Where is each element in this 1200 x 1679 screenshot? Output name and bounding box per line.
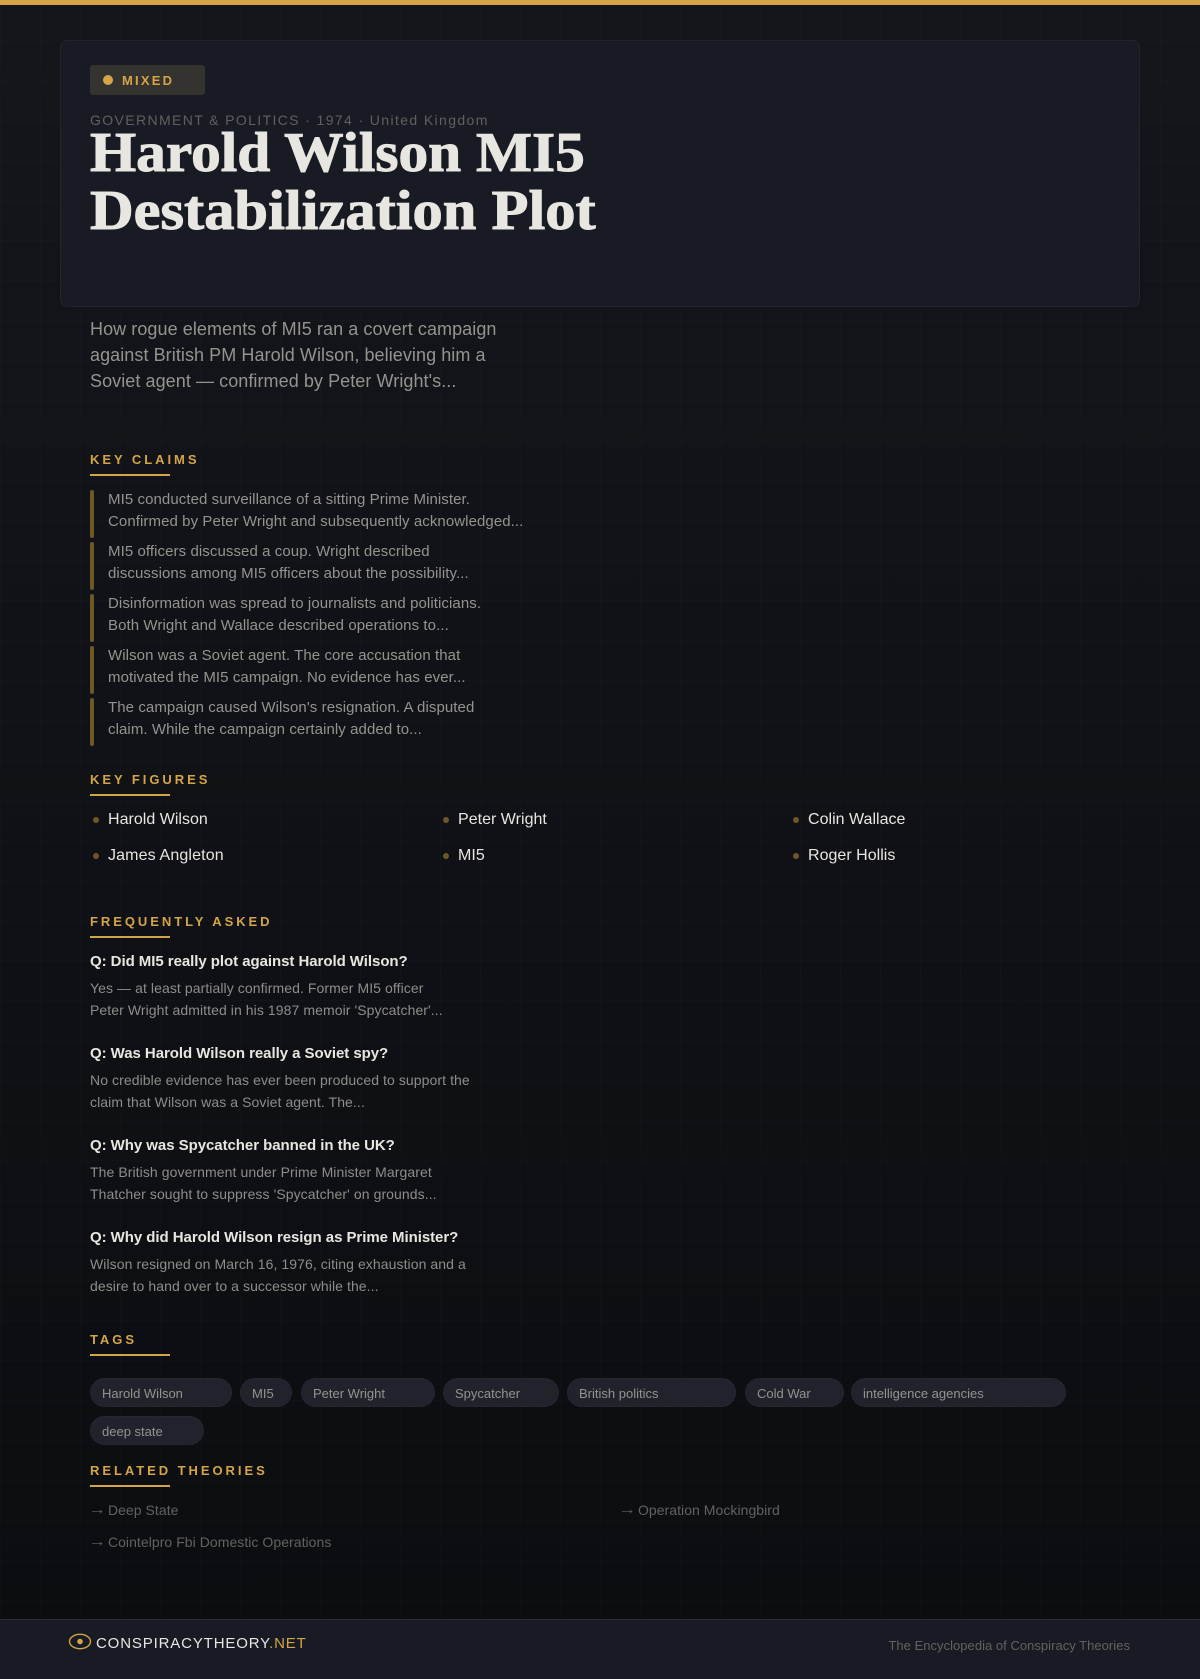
subtitle: How rogue elements of MI5 ran a covert campaign <box>90 319 496 339</box>
related link: → <box>88 1501 106 1517</box>
faq 2: Q: Was Harold Wilson really a Soviet spy? <box>90 1045 388 1062</box>
faq 4: Q: Why did Harold Wilson resign as Prime Minister? <box>90 1229 458 1246</box>
top accent bar <box>0 0 1200 5</box>
figure: Harold Wilson: Harold Wilson <box>108 811 208 828</box>
tag: Cold War <box>757 1386 811 1401</box>
title <box>90 122 596 242</box>
figure: Colin Wallace: Colin Wallace <box>808 811 905 828</box>
subtitle: Soviet agent — confirmed by Peter Wright's... <box>90 371 456 391</box>
footer tagline: The Encyclopedia of Conspiracy Theories <box>888 1638 1130 1653</box>
faq 4 <box>90 1229 466 1294</box>
heading: key figures: KEY FIGURES <box>90 772 210 787</box>
tag <box>301 1378 435 1407</box>
tag: Harold Wilson <box>102 1386 183 1401</box>
panel: header card <box>60 40 1140 307</box>
tag: Peter Wright <box>313 1386 385 1401</box>
tag <box>240 1378 292 1407</box>
figure: MI5: MI5 <box>458 847 485 864</box>
figure: Roger Hollis: Roger Hollis <box>808 847 895 864</box>
subtitle <box>90 319 496 391</box>
badge dot <box>103 75 113 85</box>
tag: British politics <box>579 1386 658 1401</box>
tag <box>443 1378 559 1407</box>
heading: related theories: RELATED THEORIES <box>90 1463 268 1478</box>
tag: MI5 <box>252 1386 274 1401</box>
faq 1: Yes — at least partially confirmed. Former MI5 officer <box>90 980 423 996</box>
footer logo text: CONSPIRACYTHEORY.NET <box>96 1635 307 1652</box>
figure: MI5 <box>443 847 485 864</box>
faq 2: No credible evidence has ever been produced to support the <box>90 1072 470 1088</box>
claim 3 <box>90 594 481 642</box>
tag: deep state <box>102 1424 163 1439</box>
tag: intelligence agencies <box>863 1386 984 1401</box>
claim 2 <box>90 542 469 590</box>
claim 2: discussions among MI5 officers about the possibility... <box>108 565 469 582</box>
claim 2: MI5 officers discussed a coup. Wright described <box>108 543 430 560</box>
claim 3: Disinformation was spread to journalists and politicians. <box>108 595 481 612</box>
claim 1: MI5 conducted surveillance of a sitting Prime Minister. <box>108 491 470 508</box>
title: Destabilization Plot <box>90 180 596 242</box>
claim 1: Confirmed by Peter Wright and subsequently acknowledged... <box>108 513 523 530</box>
related link: → <box>88 1533 106 1549</box>
badge label: MIXED <box>122 73 174 88</box>
faq 1: Q: Did MI5 really plot against Harold Wilson? <box>90 953 408 970</box>
tag <box>567 1378 736 1407</box>
tag <box>745 1378 844 1407</box>
faq 3: The British government under Prime Minister Margaret <box>90 1164 432 1180</box>
tag <box>90 1416 204 1445</box>
faq 4: Wilson resigned on March 16, 1976, citing exhaustion and a <box>90 1256 466 1272</box>
figure: Peter Wright: Peter Wright <box>458 811 547 828</box>
related link: → <box>618 1501 636 1517</box>
claim 4: motivated the MI5 campaign. No evidence has ever... <box>108 669 466 686</box>
claim 4 <box>90 646 466 694</box>
claim 5 <box>90 698 474 746</box>
figure: James Angleton: James Angleton <box>108 847 224 864</box>
tag: Spycatcher <box>455 1386 520 1401</box>
heading: tags: TAGS <box>90 1332 137 1347</box>
icon: eye <box>68 1634 92 1650</box>
claim 5: The campaign caused Wilson's resignation. A disputed <box>108 699 474 716</box>
claim 3: Both Wright and Wallace described operations to... <box>108 617 449 634</box>
faq 3: Q: Why was Spycatcher banned in the UK? <box>90 1137 395 1154</box>
badge: mixed verdict <box>90 65 205 95</box>
related link: Cointelpro Fbi Domestic Operations <box>108 1534 331 1550</box>
heading: key claims: KEY CLAIMS <box>90 452 199 467</box>
faq 2: claim that Wilson was a Soviet agent. The... <box>90 1094 365 1110</box>
faq 1 <box>90 953 443 1018</box>
footer <box>0 1619 1200 1679</box>
faq 3: Thatcher sought to suppress 'Spycatcher' on grounds... <box>90 1186 437 1202</box>
faq 2 <box>90 1045 470 1110</box>
title: Harold Wilson MI5 <box>90 122 585 184</box>
claim 1 <box>90 490 523 538</box>
category line: GOVERNMENT & POLITICS · 1974 · United Kingdom <box>90 112 489 128</box>
tag <box>851 1378 1066 1407</box>
related link: Deep State <box>108 1502 178 1518</box>
related link: Operation Mockingbird <box>638 1502 780 1518</box>
subtitle: against British PM Harold Wilson, believing him a <box>90 345 486 365</box>
faq 4: desire to hand over to a successor while the... <box>90 1278 379 1294</box>
faq 1: Peter Wright admitted in his 1987 memoir 'Spycatcher'... <box>90 1002 443 1018</box>
claim 4: Wilson was a Soviet agent. The core accusation that <box>108 647 460 664</box>
faq 3 <box>90 1137 437 1202</box>
claim 5: claim. While the campaign certainly added to... <box>108 721 422 738</box>
tag <box>90 1378 232 1407</box>
heading: frequently asked: FREQUENTLY ASKED <box>90 914 273 929</box>
